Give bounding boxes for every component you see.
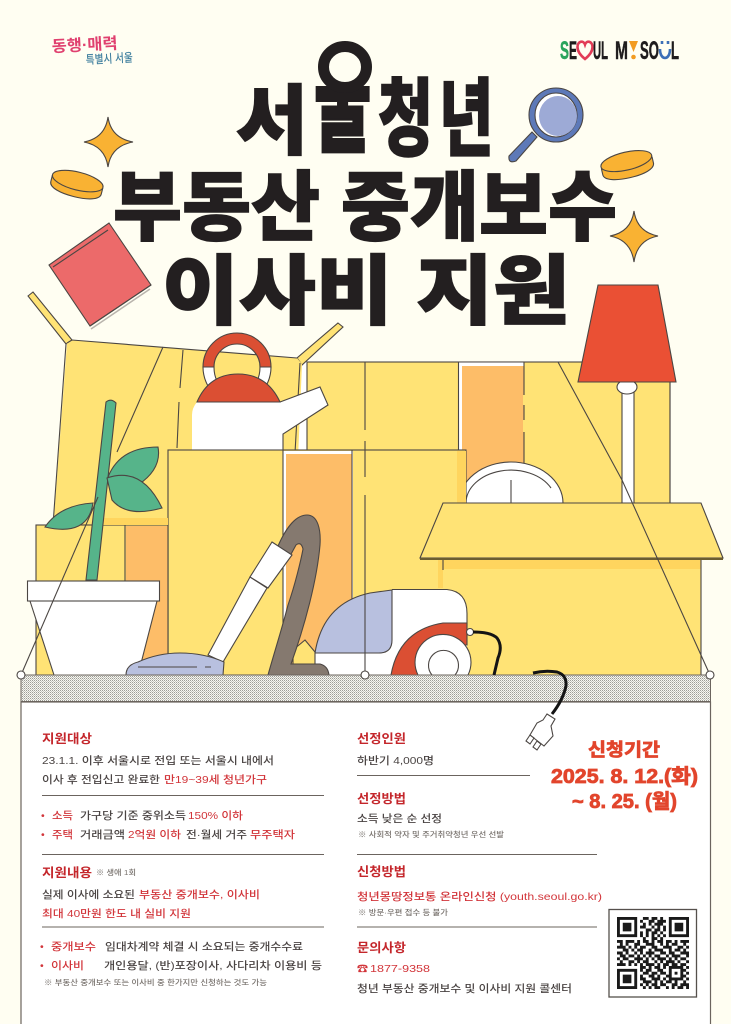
section: eligibility: 무주택자 [250,829,295,841]
illustration: back right box [298,362,670,507]
section: contact: ☎ [357,963,369,975]
logo: Seoul My Soul: UL [593,37,608,65]
icon: magnifying glass [509,88,583,162]
stippled band [21,675,710,702]
section: support details: ※ 부동산 중개보수 또는 이사비 중 한가지만 신청하는 것도 가능 [44,977,267,987]
logo: Seoul My Soul [560,37,679,65]
section: selection: 소득 낮은 순 선정 [357,812,442,825]
section: support details: 최대 40만원 한도 내 실비 지원 [42,907,191,920]
vacuum cord and plug [466,628,566,750]
application period: 신청기간 [588,740,660,760]
illustration: floor lamp [578,285,676,504]
illustration: potted plant [28,400,162,675]
section: support details: 부동산 중개보수, 이사비 [139,888,260,901]
title: 년 [439,52,494,175]
section: eligibility [41,732,324,854]
section: eligibility: 가구당 기준 중위소득 [80,809,186,822]
hanging hooks [17,671,714,679]
logo: 동행 매력 특별시 서울 [51,34,133,67]
logo: Seoul My Soul: L [671,37,679,65]
section: support details: 개인용달, (반)포장이사, 사다리차 이용비 등 [104,959,322,972]
section: contact [357,940,572,995]
logo: Seoul My Soul: S [560,37,569,65]
section: eligibility: • [41,810,45,822]
section: selection: 선정인원 [357,732,406,746]
section: support details: • [40,941,44,953]
section: eligibility: 23.1.1. 이후 서울시로 전입 또는 서울시 내에서 [42,754,274,767]
section: selection: 하반기 4,000명 [357,754,434,767]
illustration: right box [420,503,723,675]
application period: 2025. 8. 12.(화) [551,765,698,788]
application period [551,740,698,813]
title: 울 [314,14,371,175]
section: selection: 선정방법 [357,792,406,806]
title: 부동산 중개보수 [113,146,617,256]
logo: 동행 매력 특별시 서울: 특별시 서울 [85,51,133,67]
section: support details [40,866,324,987]
application period: ~ 8. 25. (월) [572,790,677,813]
section: support details: 임대차계약 체결 시 소요되는 중개수수료 [105,940,303,953]
section: eligibility: 거래금액 [80,829,125,841]
title: 이사비 지원 [162,230,570,340]
decoration: coin left [49,166,105,203]
logo: Seoul My Soul: M [615,37,628,65]
illustration: guide lines [21,362,710,675]
section: application method: 신청방법 [357,864,406,879]
decoration: sparkle right [610,211,658,262]
section: support details: • [40,960,44,972]
section: eligibility: 이사 후 전입신고 완료한 [42,773,160,786]
section: application method: 청년몽땅정보통 온라인신청 (youth.seoul.go.kr) [357,891,602,903]
title [113,14,617,340]
section: selection [357,732,597,854]
section: eligibility: 2억원 이하 [128,828,181,841]
information panel [21,702,710,1024]
section: selection: ※ 사회적 약자 및 주거취약청년 우선 선발 [358,829,504,839]
illustration: vacuum cleaner [126,515,471,676]
illustration: open cardboard box [28,292,343,530]
illustration: red book [49,223,151,329]
section: contact: 1877-9358 [370,963,430,975]
illustration: clock [459,462,563,503]
illustration: center box [168,450,466,675]
illustration: low left box [36,518,168,675]
section: support details: 실제 이사에 소요된 [42,889,135,901]
logo: Seoul My Soul: E [569,37,577,65]
logo: 동행 매력 특별시 서울: 동행·매력 [51,34,118,56]
section: eligibility: • [41,829,45,841]
section: contact: 청년 부동산 중개보수 및 이사비 지원 콜센터 [357,982,572,995]
section: application method [357,864,602,927]
section: contact: 문의사항 [357,940,407,955]
section: eligibility: 소득 [52,810,73,822]
section: support details: ※ 생애 1회 [96,867,136,877]
section: support details: 중개보수 [51,940,96,953]
section: support details: 지원내용 [42,866,92,880]
decoration: coin right [599,146,655,183]
section: eligibility: 만19~39세 청년가구 [164,774,267,786]
title: 청 [378,52,433,174]
section: eligibility: 전·월세 거주 [186,829,247,841]
section: application method: ※ 방문·우편 접수 등 불가 [358,907,448,917]
illustration: kettle [192,333,328,450]
section: eligibility: 주택 [52,829,73,841]
title: 서 [236,61,308,171]
logo: Seoul My Soul: SO [640,37,659,65]
QR code [609,910,696,997]
decoration: sparkle left [84,117,133,167]
section: eligibility: 150% 이하 [188,809,243,822]
section: support details: 이사비 [51,960,84,972]
section: eligibility: 지원대상 [42,732,93,746]
